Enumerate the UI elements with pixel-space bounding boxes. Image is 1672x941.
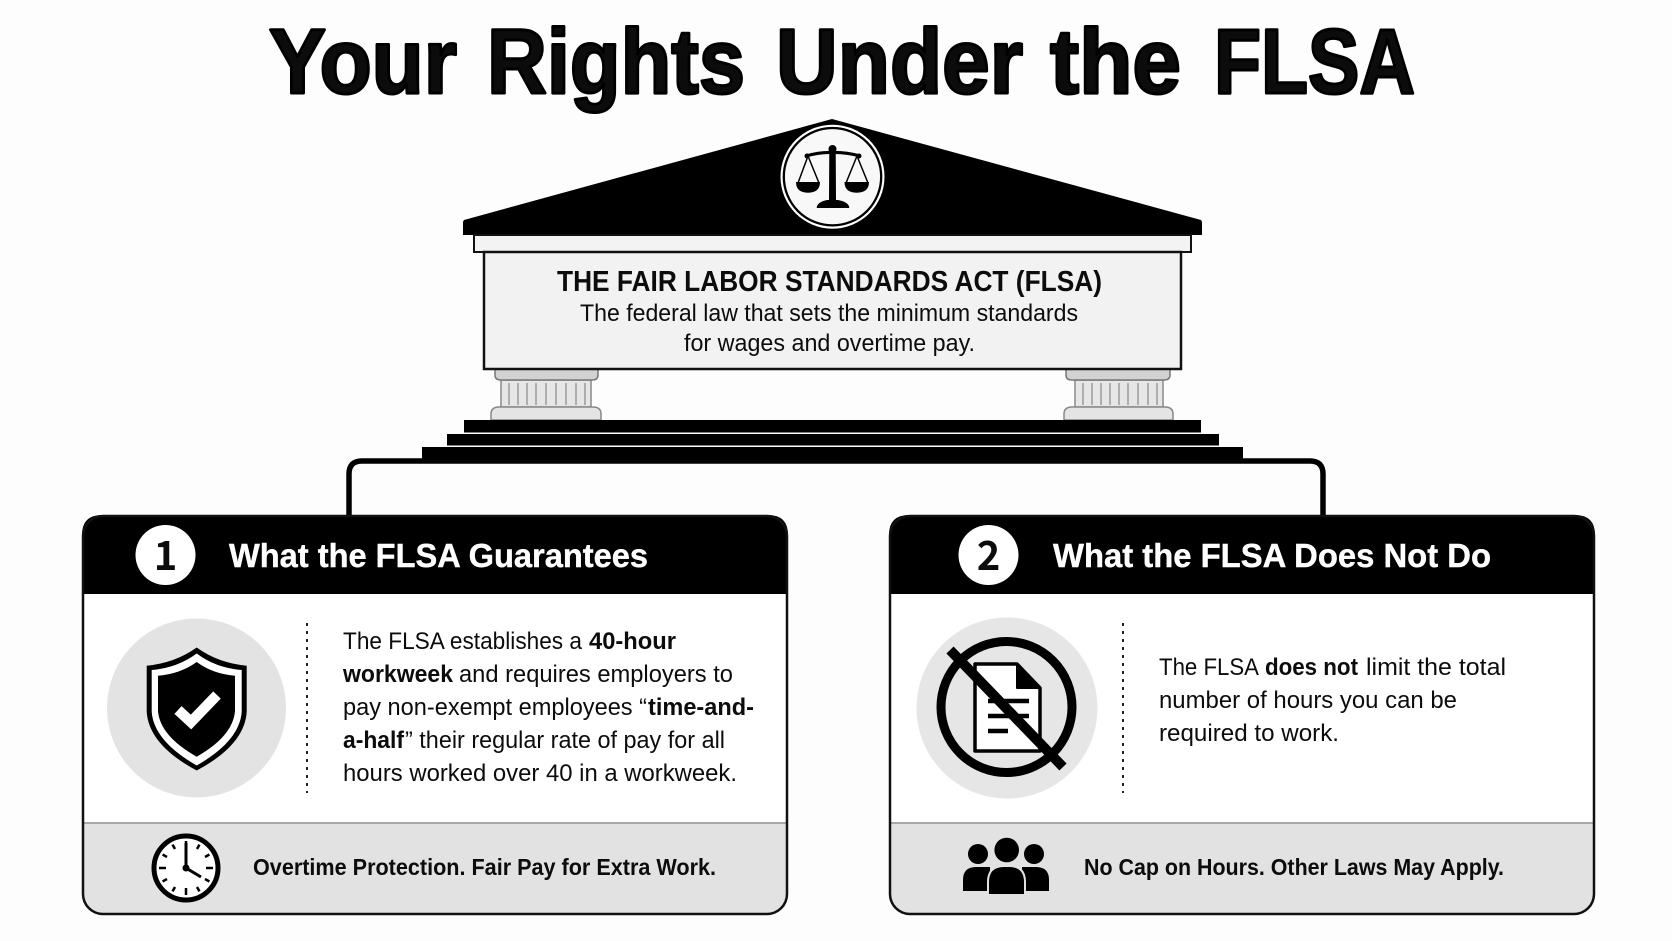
panel 1 body text: ” their regular rate of pay for all: [405, 727, 725, 754]
connector lines from building to panels: [349, 461, 1323, 516]
panel 1 body text: time-and-: [648, 694, 754, 721]
cornice band: [474, 235, 1191, 252]
icon: shield with check: [107, 618, 286, 798]
icon: clock: [154, 836, 218, 900]
entablature panel with text: [484, 252, 1181, 369]
title: [269, 11, 1415, 113]
panel 1: What the FLSA Guarantees: [82, 515, 788, 914]
panel 1 footer background: [83, 823, 787, 914]
panel 1 body text: and requires employers to: [459, 661, 733, 688]
number badge 2: 2: [977, 524, 1000, 582]
panel 1 heading: What the FLSA Guarantees: [229, 537, 648, 574]
title: the: [1050, 11, 1181, 113]
panel heading: THE FAIR LABOR STANDARDS ACT (FLSA): [557, 266, 1102, 298]
title: Your: [269, 11, 457, 113]
title: FLSA: [1214, 11, 1415, 113]
panel 1 body text: 40-hour: [589, 628, 676, 655]
column: left: [491, 369, 601, 420]
panel 2 heading: What the FLSA Does Not Do: [1053, 537, 1491, 574]
panel description: [580, 300, 1078, 357]
panel 2 footer background: [890, 823, 1594, 914]
icon: scales of justice medallion: [780, 125, 884, 229]
panel description: The federal law that sets the minimum standards: [580, 300, 1078, 327]
panel 1 body text: a-half: [343, 727, 405, 754]
title: Rights: [487, 11, 745, 113]
title: Under: [776, 11, 1023, 113]
panel 1 body text: The FLSA establishes a: [343, 628, 583, 655]
column: right: [1064, 369, 1173, 420]
panel 1 body text: workweek: [342, 661, 454, 688]
panel 2 body text: required to work.: [1159, 720, 1339, 747]
panel description: for wages and overtime pay.: [684, 330, 975, 357]
steps: [422, 420, 1243, 462]
panel 2 footer text: No Cap on Hours. Other Laws May Apply.: [1084, 854, 1504, 880]
panel 1 body text: pay non-exempt employees “: [343, 694, 647, 721]
panel 2: What the FLSA Does Not Do: [889, 515, 1595, 914]
panel 2 body text: [1159, 654, 1506, 747]
panel 1 header bar: [82, 515, 788, 594]
icon: prohibited document: [916, 618, 1098, 798]
panel 2 body text: The FLSA: [1159, 654, 1259, 681]
number badge 1: [136, 524, 196, 585]
panel 2 header bar: [889, 515, 1595, 594]
number badge 2: [958, 524, 1018, 585]
panel 2 body text: does not: [1265, 654, 1358, 681]
panel 1 body text: hours worked over 40 in a workweek.: [343, 760, 737, 787]
building: federal law temple: [422, 119, 1243, 462]
dotted divider: [1122, 623, 1124, 793]
icon: group of people: [963, 838, 1049, 895]
roof pediment: [463, 119, 1202, 235]
panel 2 body text: limit the total: [1366, 654, 1506, 681]
panel 2 body text: number of hours you can be: [1159, 687, 1457, 714]
number badge 1: 1: [154, 524, 177, 582]
panel 1 footer text: Overtime Protection. Fair Pay for Extra Work.: [253, 854, 716, 880]
panel 1 body text: [342, 628, 754, 787]
dotted divider: [306, 623, 308, 793]
